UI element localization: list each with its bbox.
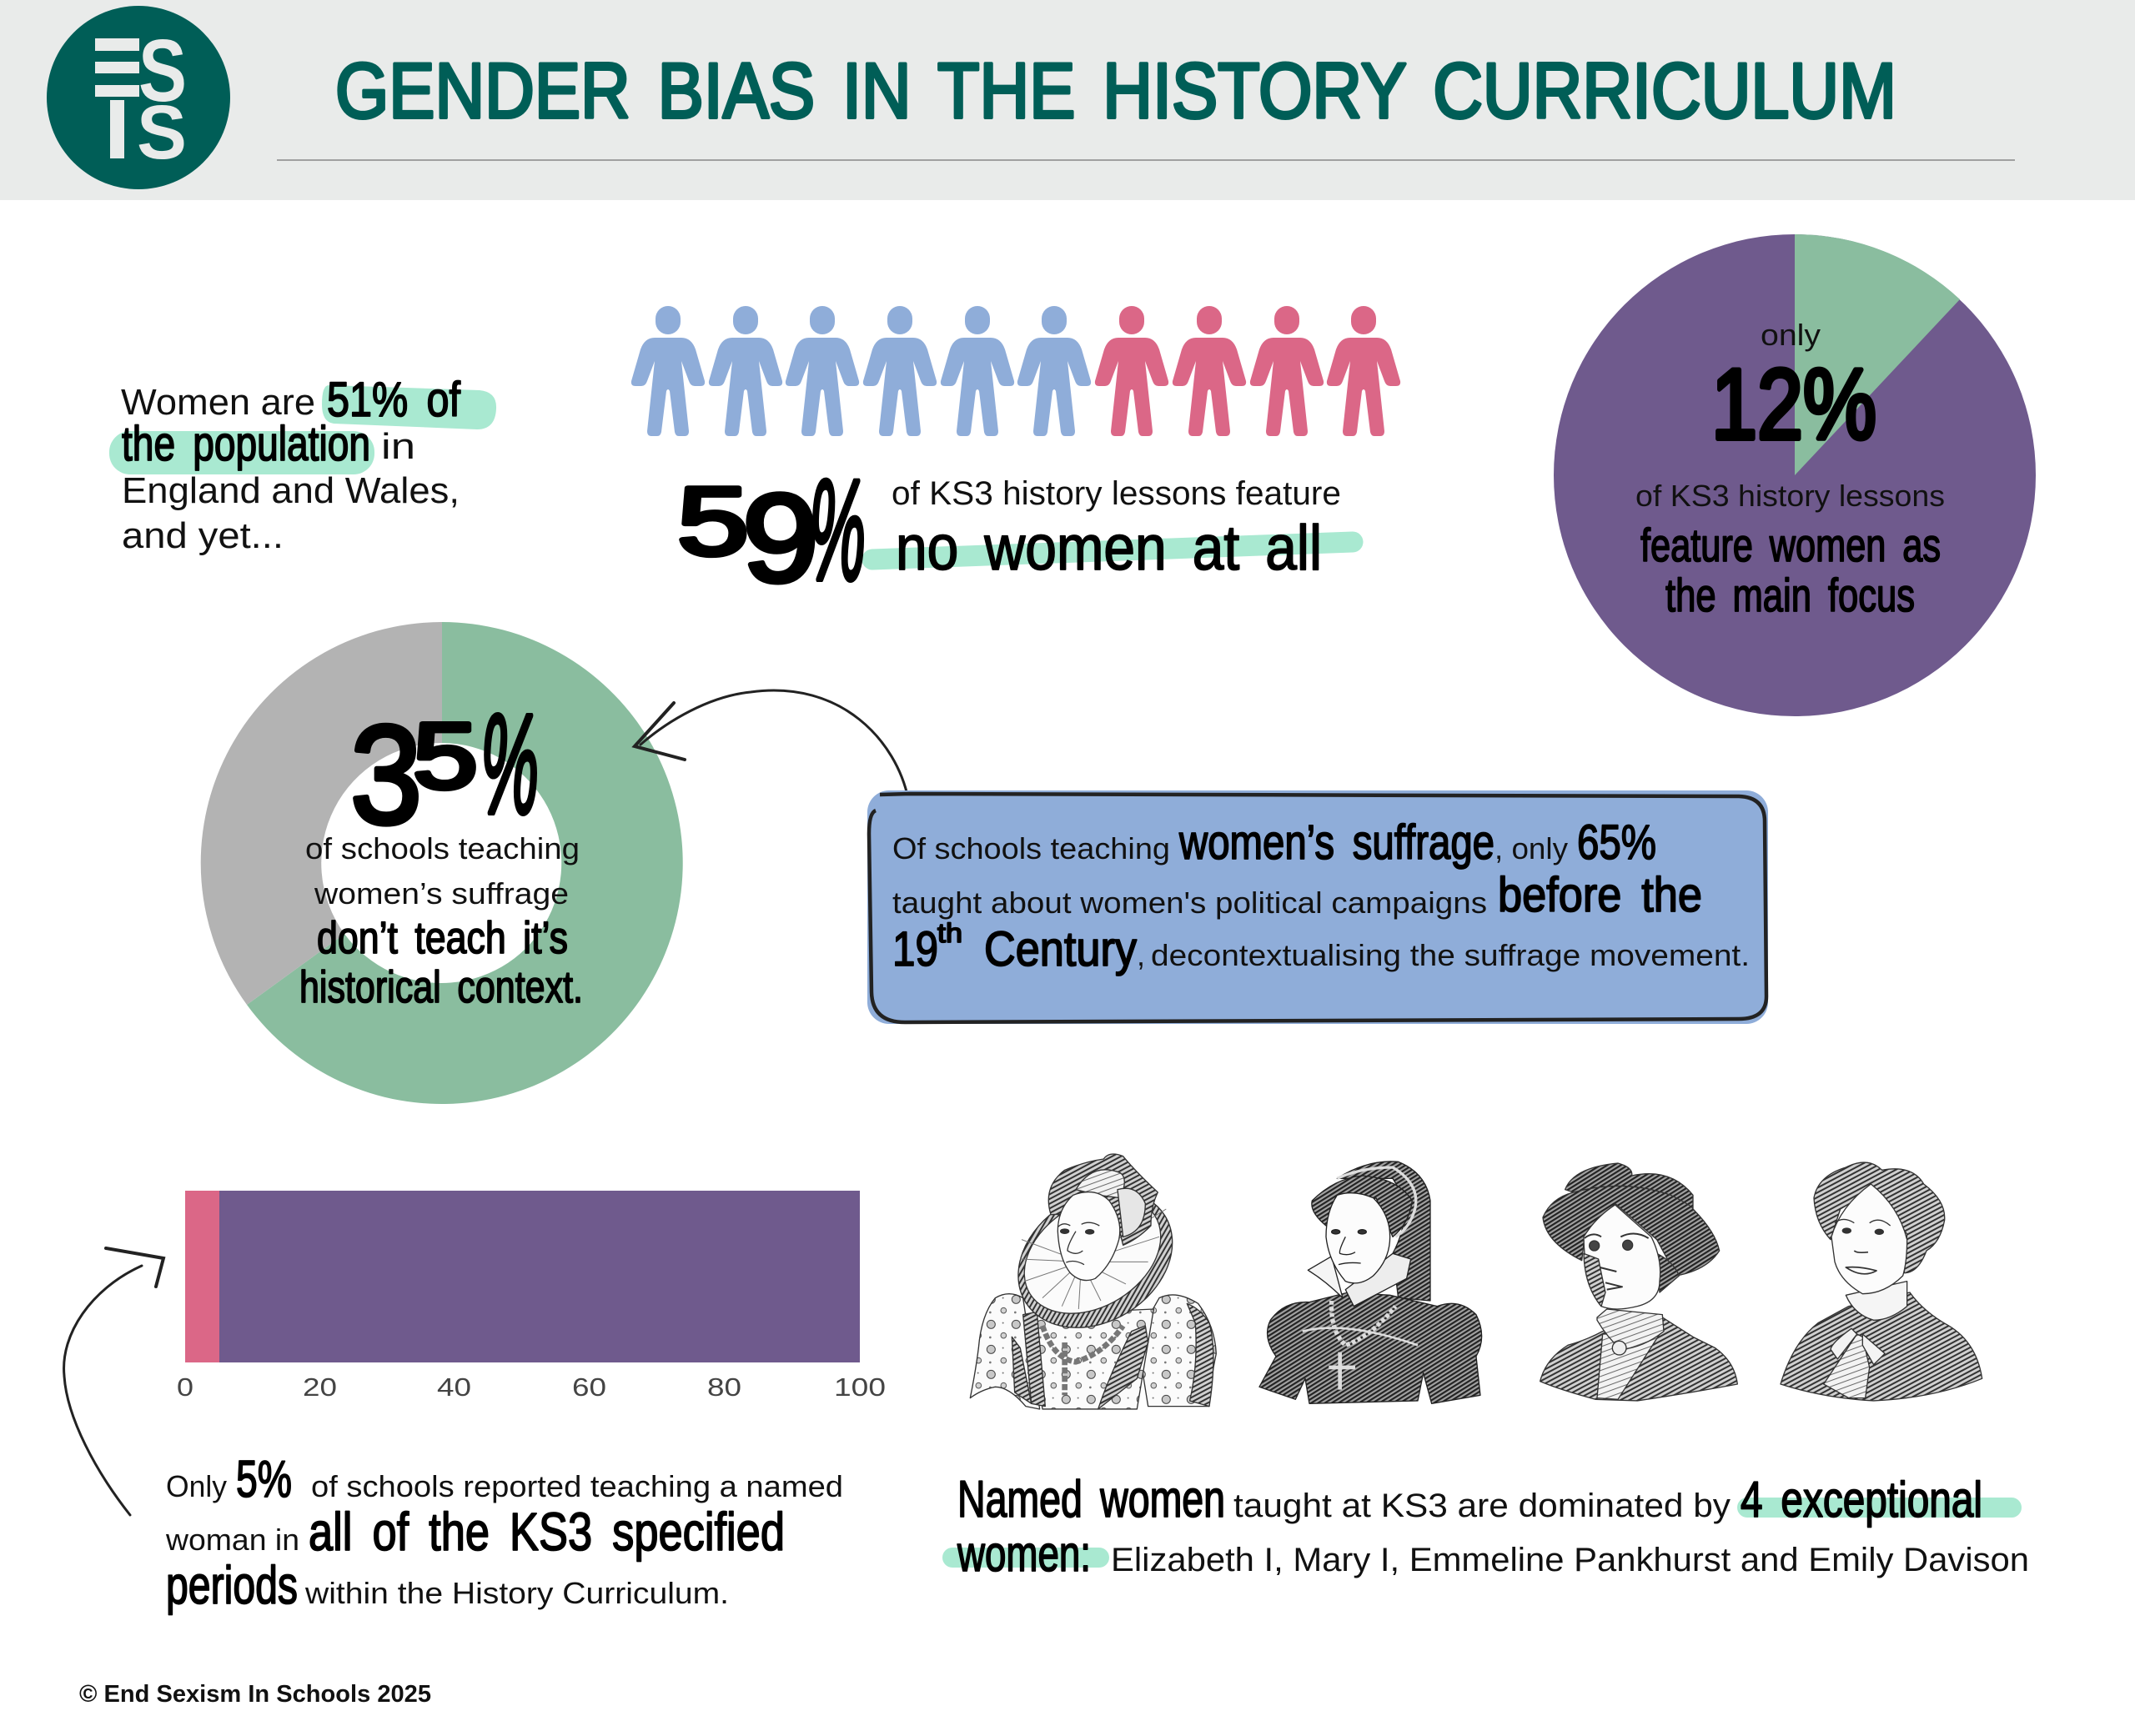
text block: named women: Elizabeth I, Mary I, Emmeline Pankhurst and Emily Davison (1111, 1542, 2029, 1578)
title: GENDER BIAS IN THE HISTORY CURRICULUM (335, 47, 1896, 134)
text block: named woman: of schools reported teaching a named (311, 1469, 843, 1503)
bar chart: 5 percent: 20 (303, 1372, 337, 1402)
icon: End Sexism In Schools logo: S (138, 22, 187, 120)
text block: named woman: periods (166, 1555, 298, 1615)
callout: suffrage context: 65% (1577, 815, 1656, 870)
stat: 59 percent: of KS3 history lessons feature (892, 475, 1341, 512)
bar chart: 5 percent: 60 (572, 1372, 606, 1402)
footer credit: © End Sexism In Schools 2025 (79, 1681, 431, 1708)
bar chart: 5 percent: 40 (437, 1372, 471, 1402)
bar chart: 5 percent: 0 (177, 1372, 193, 1402)
donut chart: 35 percent (201, 622, 683, 1104)
stat: 59 percent: 5 (677, 467, 749, 575)
pie chart: 12 percent: the main focus (1665, 569, 1915, 621)
donut chart: 35 percent: 5 (413, 704, 478, 808)
pie chart: 12 percent: only (1761, 318, 1821, 352)
callout: suffrage context: women’s suffrage (1178, 815, 1494, 870)
text block: population: and yet... (122, 515, 284, 556)
text block: named woman: woman in (165, 1523, 299, 1557)
callout: suffrage context: Century (984, 922, 1137, 976)
callout: suffrage context: th (937, 918, 962, 948)
donut chart: 35 percent: historical context. (299, 962, 583, 1012)
icon: End Sexism In Schools logo (47, 6, 230, 189)
pie chart: 12 percent: 12% (1711, 349, 1876, 460)
bar chart: 5 percent (177, 1191, 886, 1402)
pictogram: ten people (631, 306, 1400, 436)
portrait: Mary I (1259, 1162, 1482, 1403)
arrow: text to bar chart (64, 1248, 163, 1515)
callout: suffrage context: decontextualising the suffrage movement. (1151, 938, 1750, 972)
pie chart: 12 percent: feature women as (1640, 519, 1941, 571)
text block: named woman: Only (166, 1469, 227, 1503)
text block: named women: Named women (957, 1471, 1225, 1528)
text block: population: in (381, 426, 415, 467)
portrait: Elizabeth I (970, 1154, 1216, 1409)
callout: suffrage context: , only (1494, 831, 1568, 865)
bar chart: 5 percent: 100 (834, 1372, 886, 1402)
text block: named woman (165, 1451, 843, 1615)
stat: 59 percent: % (809, 450, 866, 610)
callout: suffrage context (867, 790, 1768, 1024)
donut chart: 35 percent: % (480, 685, 539, 844)
text block: population (109, 373, 496, 556)
text block: named women: women: (957, 1526, 1091, 1582)
icon: End Sexism In Schools logo: S (137, 90, 187, 175)
callout: suffrage context: 19 (892, 922, 938, 976)
donut chart: 35 percent: of schools teaching (305, 831, 580, 865)
portrait: Emmeline Pankhurst (1781, 1162, 1982, 1401)
text block: named woman: all of the KS3 specified (309, 1502, 785, 1562)
header band (0, 0, 2135, 200)
bar chart: 5 percent: 80 (707, 1372, 741, 1402)
text block: named woman: within the History Curriculum. (304, 1576, 729, 1610)
text block: population: the population (122, 417, 370, 471)
text block: named woman: 5% (236, 1451, 292, 1508)
pie chart: 12 percent: of KS3 history lessons (1635, 479, 1945, 513)
text block: named women (952, 1471, 2029, 1582)
stat: 59 percent: 9 (742, 468, 819, 608)
text block: population: Women are (121, 382, 315, 423)
stat: 59 percent: no women at all (896, 513, 1322, 584)
callout: suffrage context: before the (1498, 868, 1702, 922)
donut chart: 35 percent: 3 (350, 696, 422, 853)
stat: 59 percent (677, 450, 1353, 610)
donut chart: 35 percent: don’t teach it’s (317, 913, 568, 963)
callout: suffrage context: , (1137, 938, 1145, 972)
callout: suffrage context: Of schools teaching (892, 831, 1170, 865)
portrait: Emily Davison (1540, 1163, 1737, 1401)
arrow: callout to donut (635, 690, 908, 799)
text block: population: England and Wales, (122, 470, 460, 511)
text block: named women: taught at KS3 are dominated by (1233, 1488, 1731, 1524)
text block: named women: 4 exceptional (1741, 1472, 1982, 1528)
pie chart: 12 percent (1554, 234, 2036, 716)
donut chart: 35 percent: women’s suffrage (314, 876, 569, 911)
callout: suffrage context: taught about women's political campaigns (892, 886, 1487, 920)
text block: population: 51% of (327, 373, 461, 427)
